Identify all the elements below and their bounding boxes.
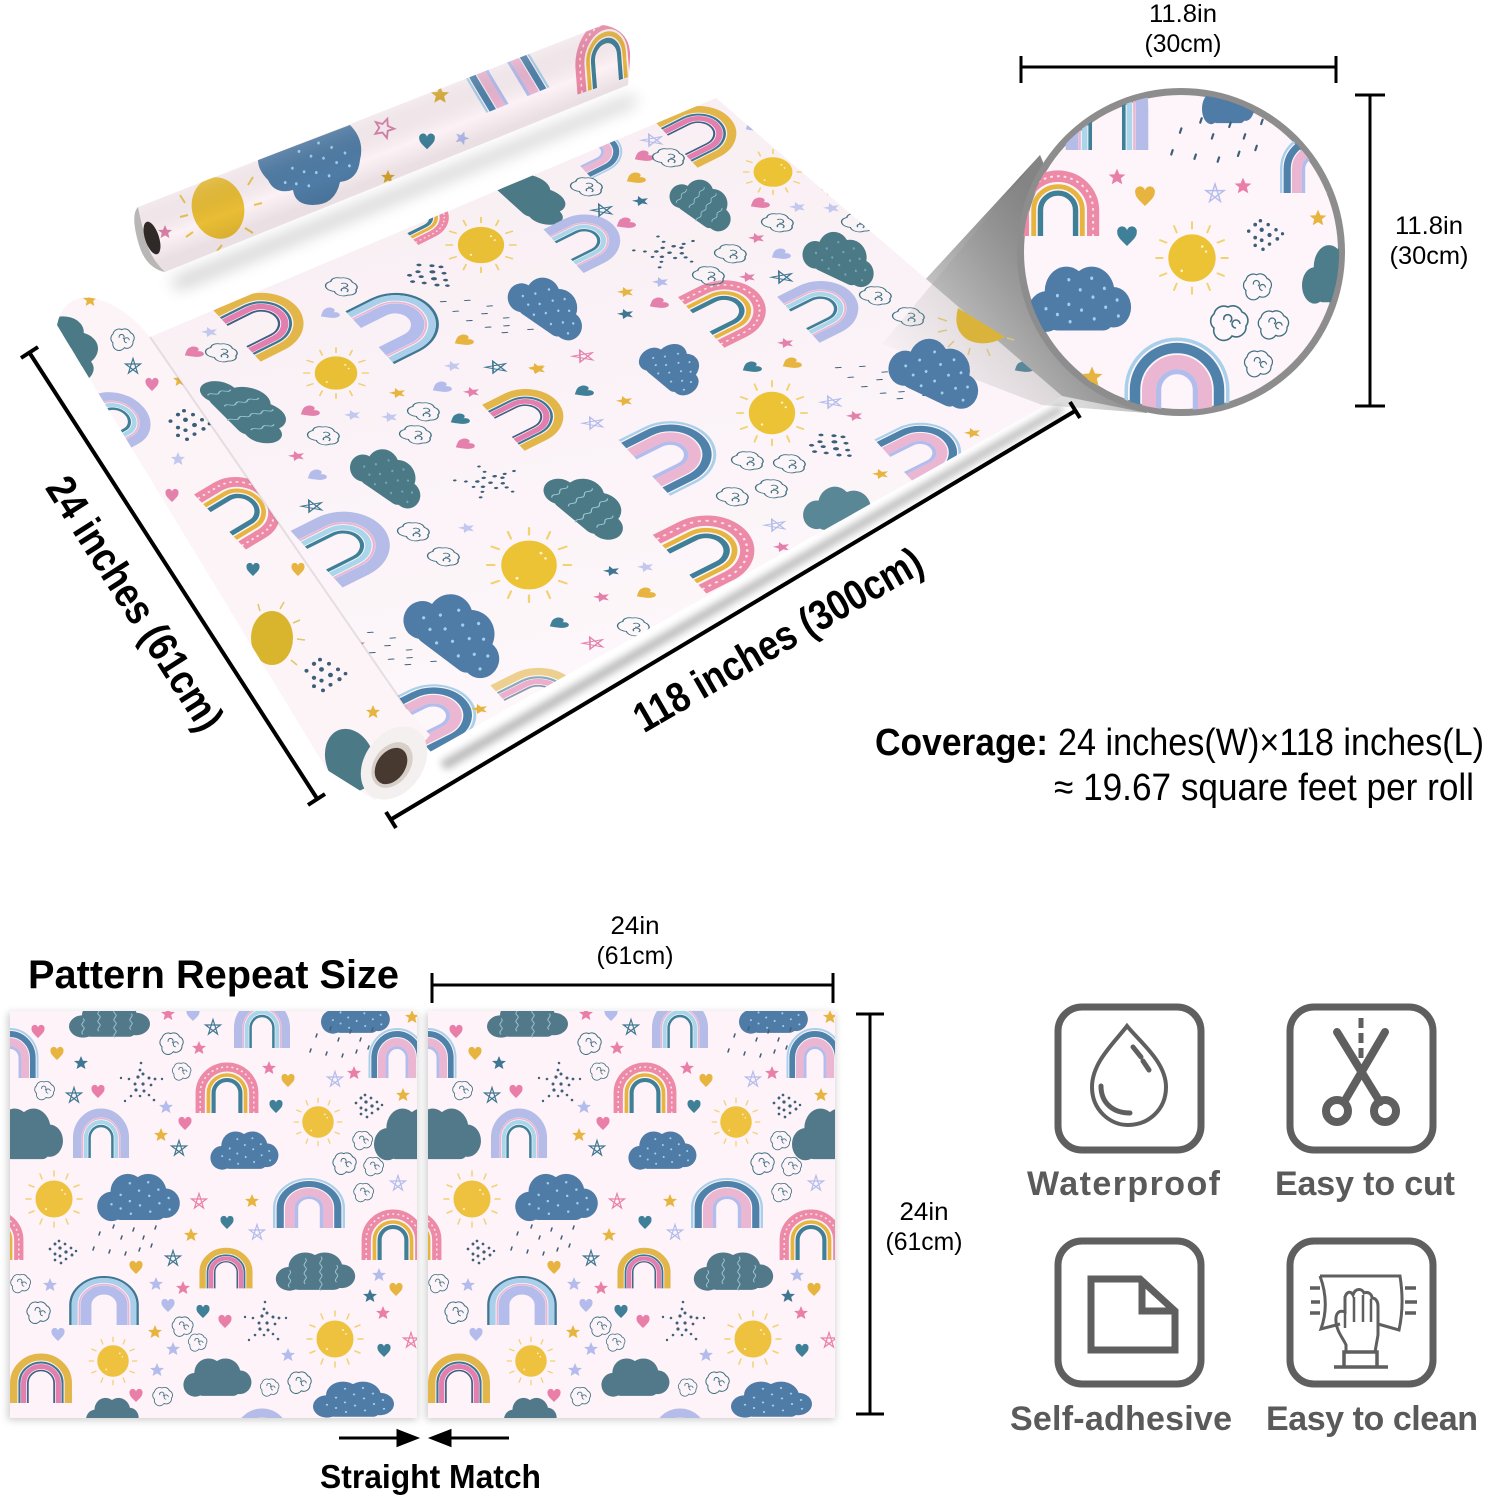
icon: easy to clean bbox=[1290, 1241, 1433, 1384]
dimension: circle width: 11.8in bbox=[1149, 0, 1217, 28]
label: easy to cut: Easy to cut bbox=[1275, 1165, 1455, 1203]
dimension: circle height: 11.8in bbox=[1395, 212, 1463, 240]
dimension: roll width: 24 inches (61cm) bbox=[37, 467, 233, 739]
magnifier bbox=[1018, 88, 1345, 416]
dimension: pattern height: 24in bbox=[900, 1198, 948, 1226]
icon: scissors bbox=[1290, 1007, 1433, 1150]
dimension: pattern width: 24in bbox=[610, 912, 660, 940]
dimension: roll width bbox=[21, 347, 325, 805]
icon: self-adhesive bbox=[1058, 1241, 1201, 1384]
coverage text bbox=[875, 722, 1484, 809]
dimension: pattern height bbox=[856, 1014, 962, 1414]
dimension: pattern width: (61cm) bbox=[596, 942, 674, 970]
small roll bbox=[134, 14, 636, 290]
long roller bbox=[57, 297, 430, 800]
dimension: roll length bbox=[386, 402, 1080, 828]
dimension: circle height: (30cm) bbox=[1390, 242, 1468, 270]
label: self-adhesive: Self-adhesive bbox=[1010, 1400, 1232, 1438]
dimension: circle height bbox=[1355, 95, 1468, 406]
dimension: pattern height: (61cm) bbox=[886, 1228, 962, 1256]
dimension: circle width: (30cm) bbox=[1144, 30, 1222, 58]
dimension: roll length: 118 inches (300cm) bbox=[625, 538, 931, 741]
heading: pattern repeat size: Pattern Repeat Size bbox=[28, 953, 399, 997]
pattern tile left bbox=[4, 1009, 421, 1424]
dimension: circle width bbox=[1021, 0, 1336, 83]
pattern tile right bbox=[422, 1009, 839, 1424]
label: easy to clean: Easy to clean bbox=[1266, 1400, 1478, 1438]
icon: waterproof bbox=[1058, 1007, 1201, 1150]
arrow: left bbox=[432, 1431, 509, 1445]
magnifier cone: translucent part over sheet bbox=[882, 155, 1147, 413]
half sun and cloud seen through the cone bbox=[883, 308, 1014, 418]
rolled-out sheet bbox=[150, 98, 1062, 753]
magnifier cone: dark part behind sheet bbox=[923, 155, 1147, 413]
dimension: pattern width bbox=[432, 912, 833, 1003]
label: straight match: Straight Match bbox=[320, 1458, 541, 1495]
coverage text: Coverage: bbox=[875, 722, 1048, 764]
label: waterproof: Waterproof bbox=[1027, 1165, 1221, 1203]
sheet shadow bbox=[440, 405, 1064, 770]
arrow: right bbox=[339, 1431, 416, 1445]
